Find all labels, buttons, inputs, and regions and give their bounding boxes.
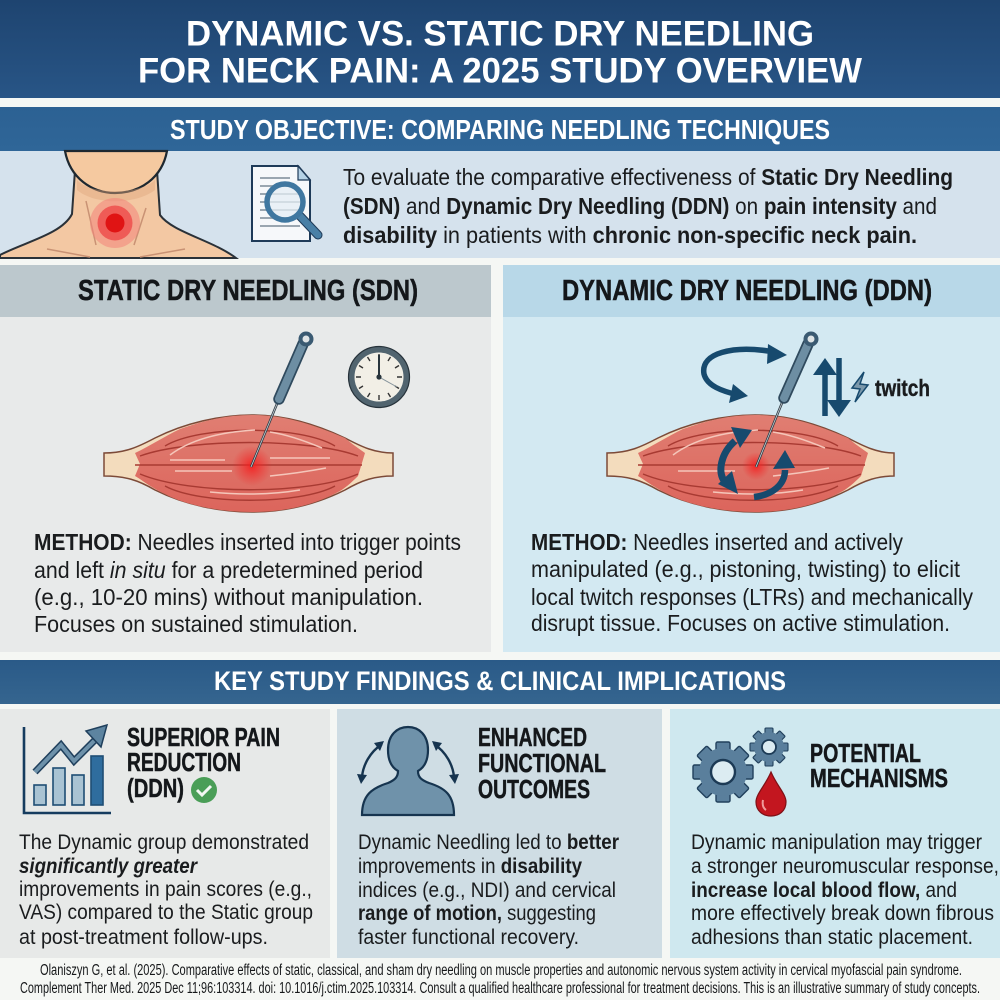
icon: bar chart with rising arrow (24, 725, 111, 813)
panel: potential mechanisms (670, 709, 1000, 958)
text: enhanced functional outcomes: faster functional recovery. (358, 925, 579, 949)
method text: static: Focuses on sustained stimulation. (34, 611, 358, 637)
heading: potential mechanisms (810, 738, 948, 793)
heading: dynamic dry needling (503, 265, 1000, 317)
text: enhanced functional outcomes: Dynamic Needling led to better (358, 830, 620, 854)
heading: superior pain reduction: REDUCTION (127, 747, 241, 777)
heading: enhanced functional outcomes: ENHANCED (478, 722, 587, 752)
heading: superior pain reduction (127, 722, 280, 803)
method text: static: METHOD: Needles inserted into trigger points (34, 529, 461, 555)
method text: static: and left in situ for a predetermined period (34, 557, 423, 583)
citation footer (20, 962, 980, 997)
icon: lightning bolt (852, 372, 868, 402)
label: twitch: twitch (875, 375, 930, 401)
text: potential mechanisms: adhesions than static placement. (691, 925, 973, 949)
method text: dynamic (531, 529, 973, 636)
heading: potential mechanisms: POTENTIAL (810, 738, 921, 768)
heading: key findings: KEY STUDY FINDINGS & CLINICAL IMPLICATIONS (214, 666, 786, 696)
heading: superior pain reduction: (DDN) (127, 773, 184, 803)
heading: key findings (0, 660, 1000, 704)
heading: study objective (0, 107, 1000, 151)
text: enhanced functional outcomes: improvements in disability (358, 854, 582, 878)
illustration: muscle with dynamic needle (607, 334, 894, 512)
icon: green check (191, 777, 217, 803)
text: enhanced functional outcomes: range of motion, suggesting (358, 901, 596, 925)
heading: static dry needling: STATIC DRY NEEDLING (SDN) (78, 275, 418, 307)
text: superior pain reduction: VAS) compared to the Static group (19, 900, 313, 924)
title banner: FOR NECK PAIN: A 2025 STUDY OVERVIEW (138, 50, 862, 90)
icon: neck with red pain point (0, 151, 236, 258)
method text: static (34, 529, 461, 637)
heading: study objective: STUDY OBJECTIVE: COMPARING NEEDLING TECHNIQUES (170, 114, 830, 145)
objective text (343, 164, 953, 248)
panel: static dry needling (0, 265, 491, 652)
text: superior pain reduction: at post-treatment follow-ups. (19, 925, 268, 949)
text: potential mechanisms (691, 830, 999, 949)
text: enhanced functional outcomes (358, 830, 620, 949)
objective text: disability in patients with chronic non-specific neck pain. (343, 222, 917, 248)
heading: enhanced functional outcomes (478, 722, 606, 804)
method text: dynamic: METHOD: Needles inserted and actively (531, 529, 903, 555)
objective text: To evaluate the comparative effectiveness of Static Dry Needling (343, 164, 953, 190)
text: superior pain reduction (19, 830, 313, 949)
panel: study objective (0, 107, 1000, 258)
heading: dynamic dry needling: DYNAMIC DRY NEEDLING (DDN) (562, 275, 932, 307)
panel: enhanced functional outcomes (337, 709, 662, 958)
icon: person with range-of-motion arrows (357, 727, 459, 815)
text: enhanced functional outcomes: indices (e.g., NDI) and cervical (358, 878, 616, 902)
text: superior pain reduction: significantly greater (19, 854, 198, 878)
panel: superior pain reduction (0, 709, 330, 958)
heading: potential mechanisms: MECHANISMS (810, 763, 948, 793)
text: superior pain reduction: The Dynamic group demonstrated (19, 830, 309, 854)
heading: superior pain reduction: SUPERIOR PAIN (127, 722, 280, 752)
text: potential mechanisms: increase local blood flow, and (691, 878, 957, 902)
arrows: rotation and pistoning (704, 344, 851, 497)
panel: dynamic dry needling (503, 265, 1000, 652)
text: superior pain reduction: improvements in pain scores (e.g., (19, 877, 312, 901)
heading: enhanced functional outcomes: FUNCTIONAL (478, 748, 606, 778)
icon: gears and blood drop (693, 728, 788, 816)
objective text: (SDN) and Dynamic Dry Needling (DDN) on pain intensity and (343, 193, 937, 219)
heading: static dry needling (0, 265, 491, 317)
method text: dynamic: disrupt tissue. Focuses on active stimulation. (531, 610, 950, 636)
icon: clock (348, 346, 410, 408)
method text: static: (e.g., 10-20 mins) without manipulation. (34, 584, 423, 610)
illustration: muscle with static needle (104, 334, 393, 512)
heading: enhanced functional outcomes: OUTCOMES (478, 774, 590, 804)
icon: document with magnifying glass (252, 166, 318, 241)
title banner (0, 0, 1000, 98)
method text: dynamic: manipulated (e.g., pistoning, twisting) to elicit (531, 556, 961, 582)
title banner: DYNAMIC VS. STATIC DRY NEEDLING (186, 14, 814, 54)
